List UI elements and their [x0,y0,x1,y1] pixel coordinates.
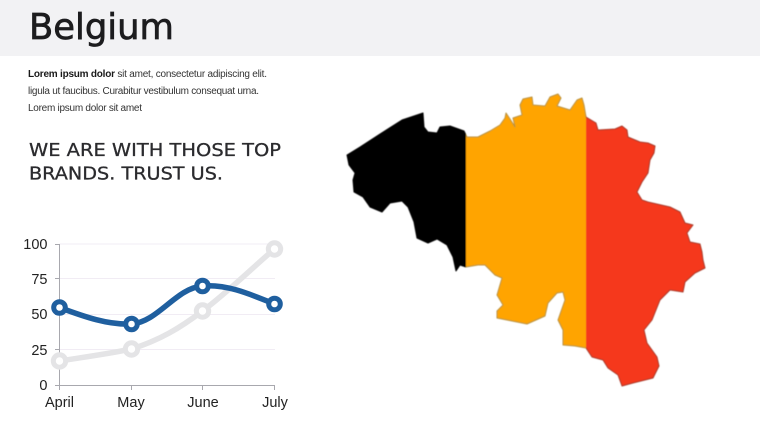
intro text block: Lorem ipsum dolor sit amet [28,103,142,114]
line chart [23,237,289,411]
grey series [53,243,281,367]
x axis labels: May [117,395,145,411]
x axis labels: June [187,395,219,411]
header band [0,0,760,56]
subheading: BRANDS. TRUST US. [29,164,223,184]
grid lines [60,244,275,350]
map: Belgium in flag colours [347,94,705,386]
intro text block: Lorem ipsum dolor sit amet, consectetur adipiscing elit. [28,69,267,80]
black stripe [346,112,467,272]
y axis labels: 25 [31,343,48,359]
red stripe [585,114,706,388]
subheading: WE ARE WITH THOSE TOP [29,140,281,161]
x axis labels [45,395,289,411]
x axis labels: April [45,395,74,411]
y axis labels: 100 [23,237,48,253]
y axis labels [23,237,48,394]
intro text block [28,69,267,114]
subheading [29,140,281,184]
axes [55,244,275,390]
y axis labels: 50 [31,307,48,323]
title: Belgium [29,7,174,48]
blue series [54,280,280,330]
y axis labels: 75 [31,272,48,288]
intro text block: ligula ut faucibus. Curabitur vestibulum consequat urna. [28,86,259,97]
yellow stripe [465,92,587,350]
x axis labels: July [262,395,289,411]
y axis labels: 0 [39,378,48,394]
